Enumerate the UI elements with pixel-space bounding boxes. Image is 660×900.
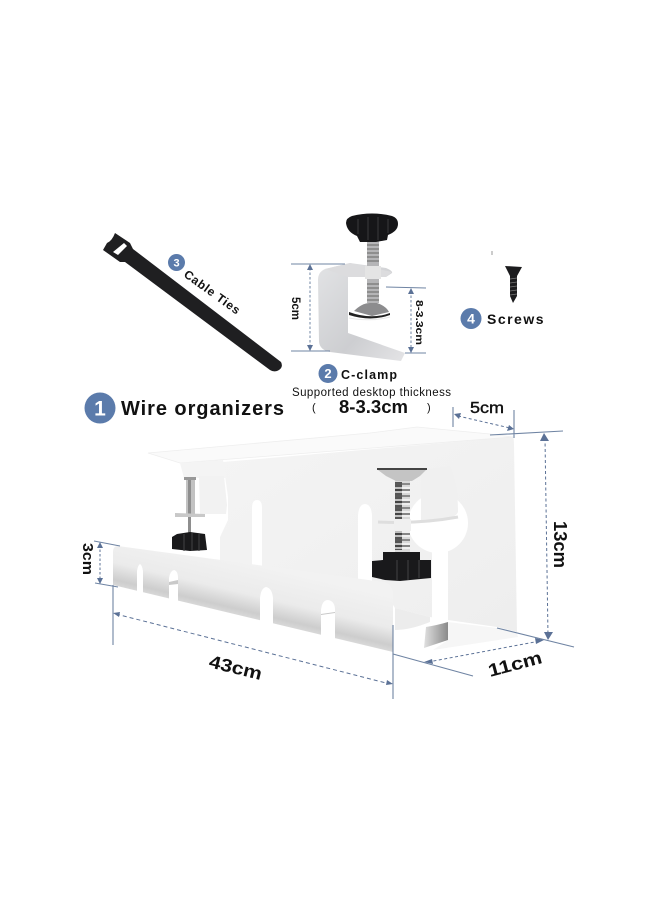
text: thickness range <box>312 397 431 417</box>
dimension: length 43cm <box>113 585 393 699</box>
label: screws: 4 <box>467 310 475 326</box>
heading: wire organizers: 1 <box>94 398 106 420</box>
dimension: depth 5cm <box>453 400 563 438</box>
wire organizer tray <box>113 427 518 652</box>
dimension: depth 11cm <box>393 628 574 681</box>
label: C-clamp: C-clamp <box>341 368 397 382</box>
text: thickness range: ( <box>312 402 316 414</box>
tray: flange underside <box>180 460 226 478</box>
label: C-clamp <box>318 364 397 383</box>
dimension: clamp opening 8-3.3cm <box>386 287 426 353</box>
dimension: height 13cm <box>540 433 570 640</box>
icon: cable tie <box>103 233 282 371</box>
tray: top flange <box>148 427 513 463</box>
dimension: depth 11cm: 11cm <box>486 647 544 681</box>
tray: keyhole cutouts <box>252 493 468 623</box>
tray: right clamp <box>372 466 458 581</box>
tray: back panel <box>220 437 517 632</box>
text: supported desktop thickness: Supported desktop thickness <box>292 387 451 399</box>
label: screws: Screws <box>487 311 544 327</box>
icon: screw <box>505 266 522 303</box>
dimension: clamp height 5cm: 5cm <box>289 297 303 320</box>
dimension: height 13cm: 13cm <box>550 521 570 568</box>
dimension: length 43cm: 43cm <box>207 651 264 684</box>
label: cable ties <box>168 254 243 317</box>
icon: C-clamp <box>318 214 405 361</box>
dimension: clamp opening 8-3.3cm: 8-3.3cm <box>413 300 425 345</box>
heading: wire organizers: Wire organizers <box>121 398 284 420</box>
label: C-clamp: 2 <box>324 366 332 381</box>
dimension: lip height 3cm: 3cm <box>79 543 96 575</box>
mark: small tick <box>492 251 493 255</box>
text: thickness range: ) <box>427 402 431 414</box>
tray: bottom shelf <box>433 622 518 650</box>
label: cable ties: 3 <box>173 258 180 270</box>
label: screws <box>460 308 544 329</box>
tray: left clamp <box>172 476 227 551</box>
dimension: lip height 3cm <box>79 541 120 587</box>
dimension: depth 5cm: 5cm <box>470 400 504 417</box>
dimension: clamp height 5cm <box>289 264 345 351</box>
label: cable ties: Cable Ties <box>181 267 243 317</box>
tray: lip slots <box>137 564 335 641</box>
tray: front lip <box>113 546 393 652</box>
heading: wire organizers <box>84 392 284 424</box>
text: thickness range: 8-3.3cm <box>339 397 408 417</box>
